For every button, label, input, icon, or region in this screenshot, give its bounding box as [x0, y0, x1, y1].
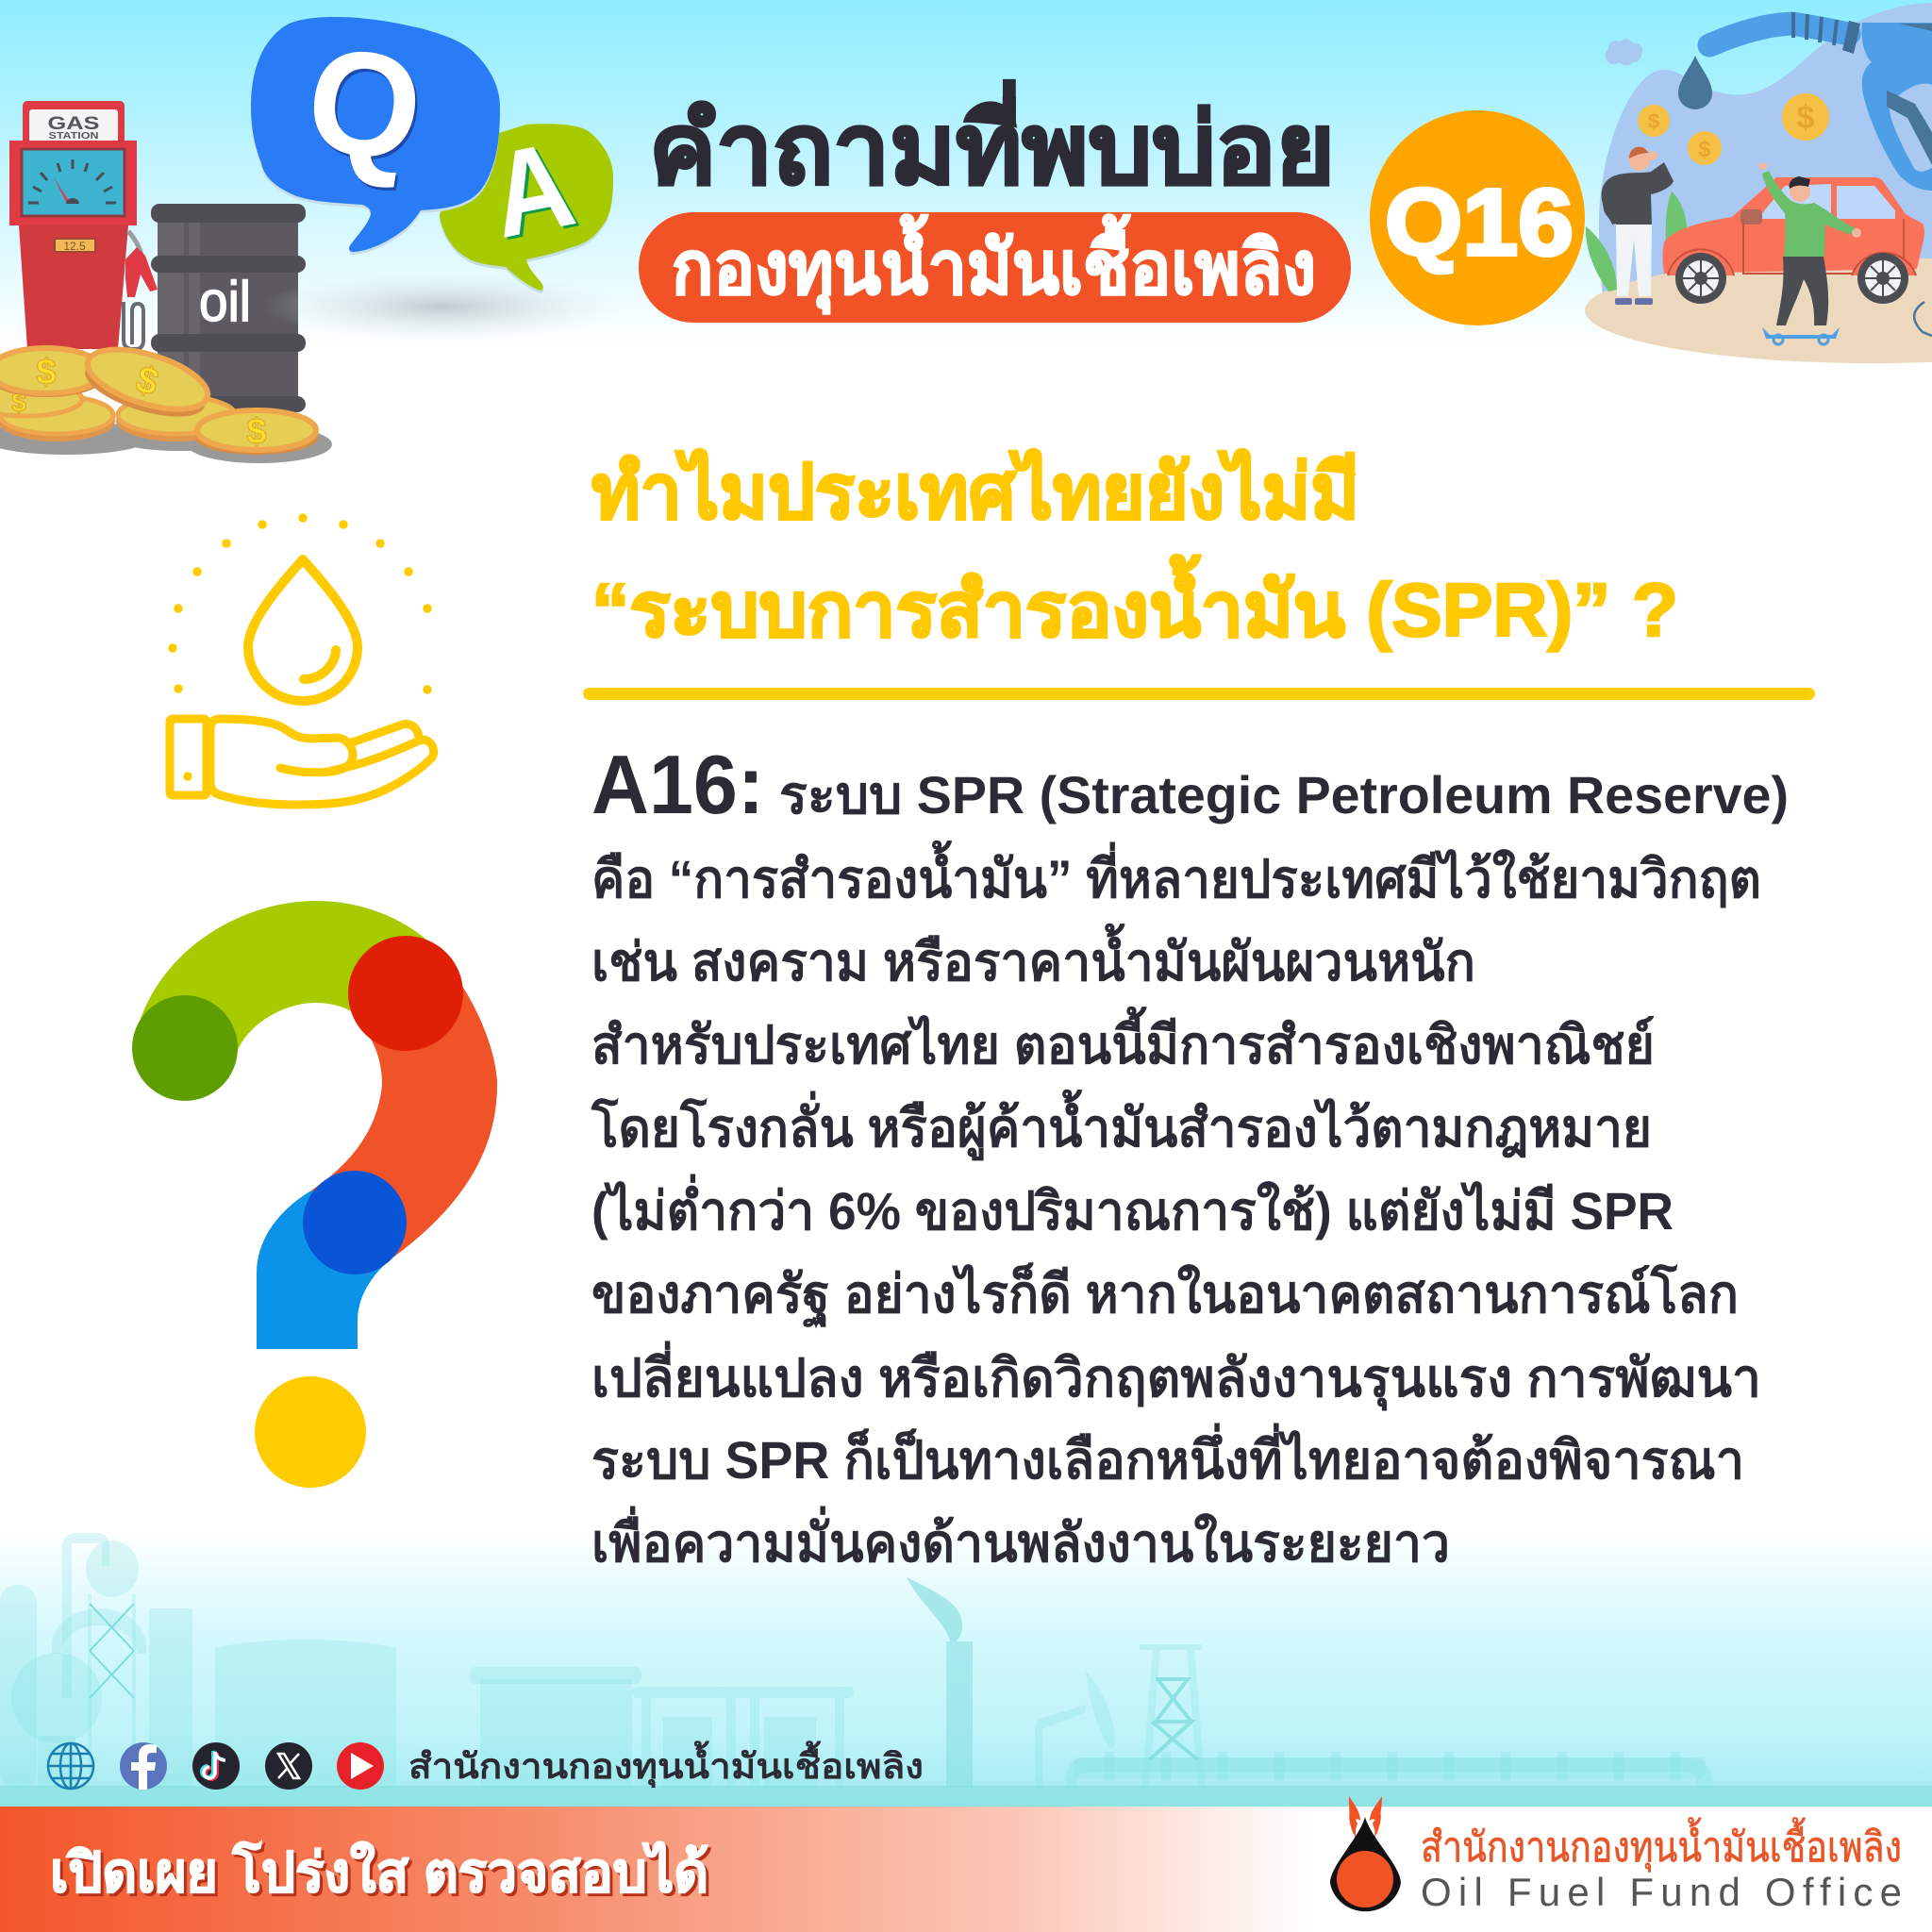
speech bubble: Q: [251, 15, 500, 255]
illustration: car and people with fuel nozzle: $: [1648, 109, 1659, 133]
heading divider: [583, 688, 1815, 700]
icon: website globe: [48, 1743, 93, 1789]
heading: question: ทำไมประเทศไทยยังไม่มี: [591, 448, 1359, 534]
answer body text: ของภาครัฐ อย่างไรก็ดี หากในอนาคตสถานการณ์โลก: [591, 1261, 1739, 1328]
social icons row: [48, 1742, 384, 1790]
illustration: coin pile: $: [11, 388, 26, 417]
title: คำถามที่พบบ่อย: [649, 80, 1335, 205]
badge: Q16: Q16: [1385, 170, 1574, 275]
illustration: coin pile: $: [131, 358, 163, 404]
speech bubble: Q: Q: [297, 15, 432, 193]
question mark graphic: [132, 936, 497, 1488]
refinery skyline silhouette: [0, 1533, 1932, 1807]
illustration: car and people with fuel nozzle: $: [1698, 137, 1711, 162]
answer body text: [591, 738, 1789, 1573]
footer slogan: เปิดเผย โปร่งใส ตรวจสอบได้: [50, 1840, 708, 1904]
illustration: gas pump: 12.5: [63, 240, 86, 253]
shadow under speech bubbles: [263, 273, 622, 341]
answer body text: A16:: [591, 738, 764, 831]
logo: oil fuel fund office: Oil Fuel Fund Office: [1421, 1870, 1902, 1914]
icon: x: [265, 1742, 312, 1790]
icon: facebook: [120, 1742, 167, 1790]
answer body text: เปลี่ยนแปลง หรือเกิดวิกฤตพลังงานรุนแรง การพัฒนา: [591, 1341, 1761, 1411]
illustration: gas pump: [9, 101, 158, 349]
answer body text: (ไม่ต่ำกว่า 6% ของปริมาณการใช้) แต่ยังไม่มี SPR: [591, 1174, 1674, 1241]
speech bubble: Q: Q: [300, 18, 434, 197]
answer body text: เช่น สงคราม หรือราคาน้ำมันผันผวนหนัก: [591, 924, 1475, 991]
footer banner: [0, 1807, 1932, 1932]
answer body text: โดยโรงกลั่น หรือผู้ค้าน้ำมันสำรองไว้ตามกฎหมาย: [591, 1090, 1652, 1161]
speech bubble: A: A: [480, 116, 584, 264]
answer body text: เพื่อความมั่นคงด้านพลังงานในระยะยาว: [591, 1506, 1450, 1573]
illustration: coin pile: $: [246, 412, 267, 452]
illustration: gas pump: STATION: [49, 131, 98, 142]
logo: oil fuel fund office: [1330, 1796, 1902, 1914]
illustration: car and people with fuel nozzle: [1585, 3, 1932, 363]
heading: question: [591, 448, 1678, 652]
illustration: gas pump: GAS: [47, 114, 100, 134]
subtitle pill: กองทุนน้ำมันเชื้อเพลิง: [672, 214, 1316, 314]
badge: Q16: [1370, 110, 1585, 325]
answer body text: ระบบ SPR (Strategic Petroleum Reserve): [779, 765, 1789, 824]
answer body text: สำหรับประเทศไทย ตอนนี้มีการสำรองเชิงพาณิชย์: [591, 1007, 1655, 1074]
illustration: coin pile: $: [36, 353, 57, 392]
icon: tiktok: [192, 1742, 240, 1790]
illustration: oil barrel: oil: [199, 270, 251, 333]
illustration: car and people with fuel nozzle: $: [1797, 100, 1815, 136]
footer slogan: เปิดเผย โปร่งใส ตรวจสอบได้: [53, 1842, 711, 1907]
agency name by social icons: สำนักงานกองทุนน้ำมันเชื้อเพลิง: [408, 1740, 924, 1789]
icon: youtube: [337, 1742, 384, 1790]
answer body text: คือ “การสำรองน้ำมัน” ที่หลายประเทศมีไว้ใช้ยามวิกฤต: [591, 841, 1761, 908]
speech bubble: A: A: [484, 119, 588, 266]
answer body text: ระบบ SPR ก็เป็นทางเลือกหนึ่งที่ไทยอาจต้องพิจารณา: [591, 1423, 1744, 1490]
illustration: oil barrel: [151, 204, 306, 412]
heading: question: “ระบบการสำรองน้ำมัน (SPR)” ?: [591, 555, 1678, 652]
speech bubble: A: [440, 116, 613, 293]
illustration: coin pile: [0, 338, 332, 463]
icon: oil drop on open hand: [168, 513, 434, 805]
